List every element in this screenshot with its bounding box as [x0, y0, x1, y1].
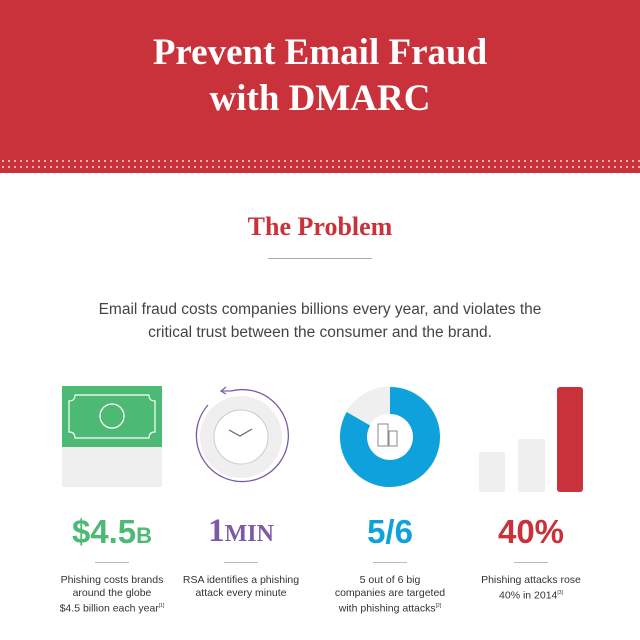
heading underline — [268, 258, 372, 259]
caption 4: Phishing attacks rose — [481, 574, 581, 586]
stat: 40%: 40% — [498, 513, 564, 550]
title: with DMARC — [210, 78, 430, 119]
caption 4 — [481, 574, 581, 602]
caption 3: with phishing attacks[2] — [339, 602, 441, 614]
stat: $4.5B: $4.5B — [72, 513, 152, 550]
caption 2: attack every minute — [195, 587, 287, 599]
icon: money bill — [62, 386, 162, 487]
icon: donut chart — [340, 387, 440, 487]
stat: 1MIN: 1MIN — [208, 513, 274, 549]
icon: bar chart — [479, 387, 583, 492]
icon: clock — [196, 387, 288, 482]
caption 2: RSA identifies a phishing — [183, 574, 299, 586]
stat: 5/6: 5/6 — [367, 513, 413, 550]
caption 3: 5 out of 6 big — [360, 574, 420, 586]
icons — [62, 386, 583, 492]
intro text — [99, 301, 541, 341]
caption 1 — [60, 574, 164, 614]
dotted band — [0, 158, 640, 170]
header banner — [0, 0, 640, 173]
title — [153, 32, 487, 119]
intro text: critical trust between the consumer and the brand. — [148, 324, 492, 341]
caption 3 — [335, 574, 445, 614]
title: Prevent Email Fraud — [153, 32, 487, 73]
caption 1: Phishing costs brands — [61, 574, 163, 586]
caption 1: around the globe — [73, 587, 151, 599]
heading: The Problem: The Problem — [248, 212, 392, 241]
intro text: Email fraud costs companies billions every year, and violates the — [99, 301, 541, 318]
caption 1: $4.5 billion each year[1] — [60, 602, 164, 614]
caption 4: 40% in 2014[3] — [499, 590, 563, 602]
caption 3: companies are targeted — [335, 587, 445, 599]
caption 2 — [183, 574, 299, 599]
